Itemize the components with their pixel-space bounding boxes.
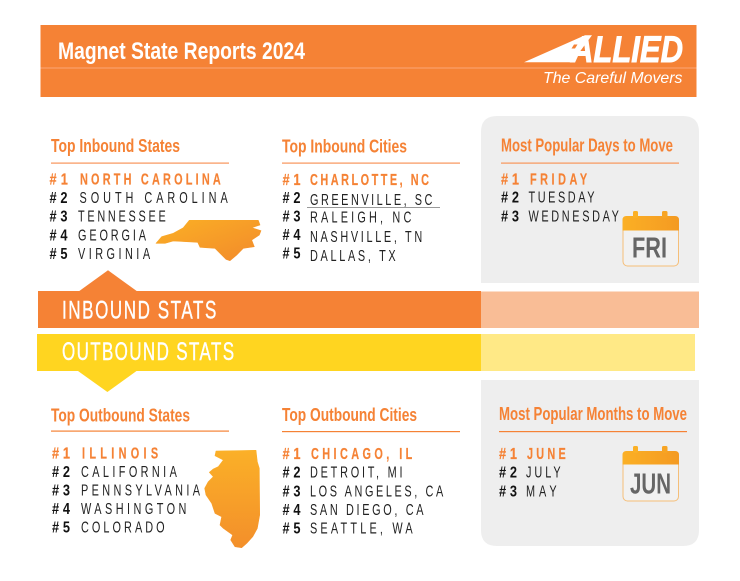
row 3: TENNESSEE — [78, 207, 166, 225]
row 1: #1 — [50, 171, 68, 189]
icon: North Carolina map — [156, 220, 261, 261]
panel: most popular months — [499, 404, 687, 501]
row 4: #4 — [282, 502, 301, 519]
row 2: #2 — [501, 189, 519, 207]
row 4: WASHINGTON — [81, 500, 186, 518]
inbound stats bar — [38, 270, 699, 328]
row 1: ILLINOIS — [82, 444, 158, 462]
row 1: CHICAGO, IL — [311, 445, 412, 463]
outbound stats bar: OUTBOUND STATS — [62, 338, 234, 366]
row 2: GREENVILLE, SC — [310, 191, 432, 209]
row 1 — [499, 445, 566, 463]
row 1: FRIDAY — [530, 170, 587, 188]
row 2: #2 — [50, 190, 68, 207]
row 3: #3 — [282, 483, 301, 501]
row 3: PENNSYLVANIA — [81, 481, 201, 499]
row 1: #1 — [501, 171, 519, 189]
row 5: DALLAS, TX — [310, 247, 396, 265]
heading: Top Inbound States — [51, 136, 180, 156]
Allied logo: ALLIED — [570, 29, 683, 70]
Allied logo: The Careful Movers — [543, 70, 682, 87]
row 3: WEDNESDAY — [528, 207, 619, 225]
panel: top outbound cities — [282, 405, 460, 538]
icon: calendar June: JUN — [630, 468, 671, 500]
row 2 — [499, 463, 561, 482]
row 2 — [501, 188, 594, 207]
row 3: #3 — [282, 208, 301, 226]
panel: months background — [481, 380, 699, 546]
row 3 — [499, 482, 557, 501]
panel: days background — [481, 116, 699, 283]
row 5: SEATTLE, WA — [310, 519, 413, 537]
heading: Top Inbound Cities — [282, 136, 407, 156]
row 1: #1 — [282, 446, 301, 463]
heading: Top Outbound Cities — [282, 405, 417, 425]
row 4: #4 — [50, 227, 68, 245]
row 1 — [501, 170, 587, 189]
row 4: #4 — [282, 227, 301, 244]
row 3: #3 — [50, 208, 68, 226]
row 3: LOS ANGELES, CA — [310, 482, 444, 500]
row 5: #5 — [282, 520, 301, 538]
panel: most popular days — [501, 136, 679, 266]
row 2: #2 — [282, 464, 301, 482]
outbound stats bar — [37, 334, 695, 392]
row 1: CHARLOTTE, NC — [310, 171, 429, 189]
row 4 — [50, 226, 147, 245]
icon: calendar Friday — [622, 211, 679, 266]
row 2: #2 — [52, 464, 70, 481]
icon: Illinois map — [205, 450, 260, 548]
row 2: #2 — [499, 464, 517, 482]
row 3: #3 — [52, 482, 70, 500]
row 1: #1 — [499, 446, 517, 463]
row 4: #4 — [52, 501, 70, 518]
panel: top inbound states — [50, 136, 261, 263]
row 3: RALEIGH, NC — [310, 208, 411, 226]
row 3: #3 — [499, 483, 517, 501]
row 4: GEORGIA — [78, 226, 147, 244]
icon: calendar June — [622, 446, 679, 501]
title: Magnet State Reports 2024 — [58, 38, 306, 65]
row 5: #5 — [50, 246, 68, 263]
row 4: SAN DIEGO, CA — [310, 501, 424, 519]
heading: Top Outbound States — [51, 406, 190, 426]
panel: top inbound cities — [282, 136, 460, 265]
row 5: #5 — [282, 245, 301, 263]
heading: Most Popular Days to Move — [501, 136, 673, 156]
row 3: MAY — [526, 482, 557, 500]
row 5: VIRGINIA — [78, 245, 151, 263]
row 1: #1 — [282, 172, 301, 189]
row 3: #3 — [501, 208, 519, 226]
icon: calendar Friday: FRI — [632, 232, 667, 264]
row 5 — [282, 245, 396, 265]
row 5: COLORADO — [81, 518, 165, 536]
header banner — [40, 25, 696, 97]
row 2: SOUTH CAROLINA — [80, 189, 228, 207]
row 5: #5 — [52, 519, 70, 537]
row 2: TUESDAY — [528, 188, 594, 206]
panel: top outbound states — [51, 406, 260, 548]
row 2: #2 — [282, 190, 301, 207]
row 1 — [52, 444, 158, 463]
Allied logo — [524, 29, 683, 87]
row 5 — [50, 245, 151, 263]
row 1: JUNE — [527, 445, 566, 463]
inbound stats bar: INBOUND STATS — [62, 296, 216, 324]
row 2: JULY — [526, 463, 561, 481]
row 1: NORTH CAROLINA — [80, 170, 221, 188]
row 2: DETROIT, MI — [310, 463, 402, 481]
row 4: NASHVILLE, TN — [310, 228, 422, 246]
row 1: #1 — [52, 445, 70, 463]
row 2: CALIFORNIA — [81, 463, 178, 481]
